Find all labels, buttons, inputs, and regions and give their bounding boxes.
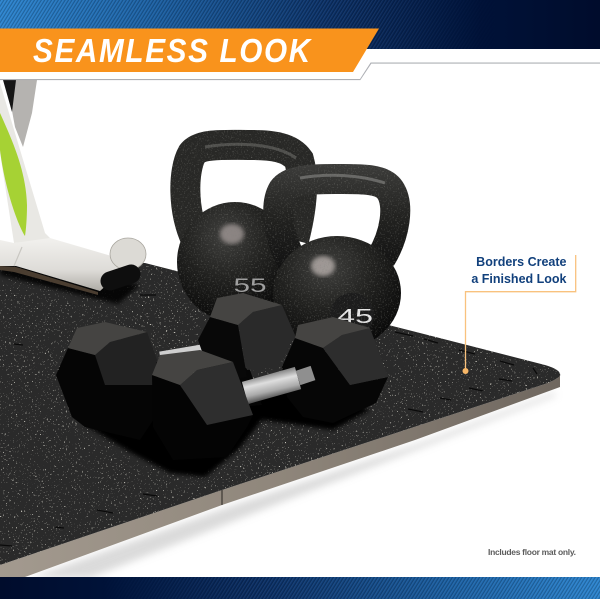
top face — [295, 317, 370, 348]
banner outline — [0, 63, 600, 80]
footer gradient — [0, 577, 600, 599]
base foot — [0, 238, 132, 291]
green accent — [0, 113, 27, 236]
callout text: a Finished Look — [471, 272, 567, 286]
weight number: 55 — [234, 276, 266, 297]
handle — [185, 145, 302, 240]
head: front — [152, 350, 253, 460]
callout text: Borders Create — [476, 255, 567, 269]
handle highlight — [205, 144, 296, 158]
wheel — [5, 80, 37, 147]
body — [273, 236, 401, 350]
handle highlight — [300, 175, 385, 183]
white strut — [0, 83, 52, 243]
floor mat — [0, 255, 565, 578]
callout dot — [462, 368, 468, 374]
body highlight — [311, 256, 335, 276]
shadow under machine — [0, 262, 140, 304]
number disc — [330, 293, 374, 337]
footer band — [0, 577, 600, 599]
rear handle — [160, 345, 225, 356]
side face — [323, 328, 388, 385]
mat top surface — [0, 262, 560, 565]
mat speckles — [0, 255, 565, 570]
top face — [152, 350, 233, 385]
head: left far — [56, 322, 160, 440]
dumbbell shadows — [85, 380, 370, 477]
orange banner — [0, 28, 379, 72]
exercise machine foot — [0, 80, 146, 304]
top face — [210, 293, 282, 325]
white banner backing — [0, 49, 600, 79]
front face — [152, 375, 253, 460]
front face — [56, 348, 160, 440]
mat border slots — [0, 295, 537, 546]
header stripes — [0, 0, 432, 49]
front face — [198, 317, 247, 380]
top face — [68, 322, 147, 355]
head: right — [282, 317, 388, 423]
handle — [278, 179, 395, 265]
brown foot underside — [0, 266, 98, 295]
dumbbells — [56, 293, 388, 477]
footnote: Includes floor mat only. — [488, 547, 576, 557]
head: rear upper — [198, 293, 295, 380]
body — [177, 202, 293, 322]
header band — [0, 0, 600, 49]
clear roller ball — [110, 238, 146, 270]
kettlebell 55 — [177, 144, 302, 322]
mat seam — [221, 490, 223, 505]
front handle — [245, 378, 298, 393]
body highlight — [220, 224, 244, 244]
black end cap — [110, 274, 131, 281]
side face — [238, 305, 295, 370]
kettlebell 45 — [273, 175, 401, 350]
side face — [95, 332, 157, 385]
wheel inner dark — [3, 80, 16, 112]
mat shadow on floor — [30, 392, 555, 578]
black fill between heads — [198, 345, 262, 410]
side face — [180, 362, 253, 425]
foot seam — [14, 247, 22, 266]
title: SEAMLESS LOOK — [33, 33, 312, 69]
header gradient — [0, 0, 600, 49]
callout leader line — [466, 255, 576, 371]
handle collar — [298, 373, 313, 378]
callout — [462, 255, 576, 374]
weight number: 45 — [337, 306, 373, 328]
footer stripes — [170, 577, 600, 599]
mat side edge — [0, 376, 560, 577]
front face — [282, 338, 388, 423]
